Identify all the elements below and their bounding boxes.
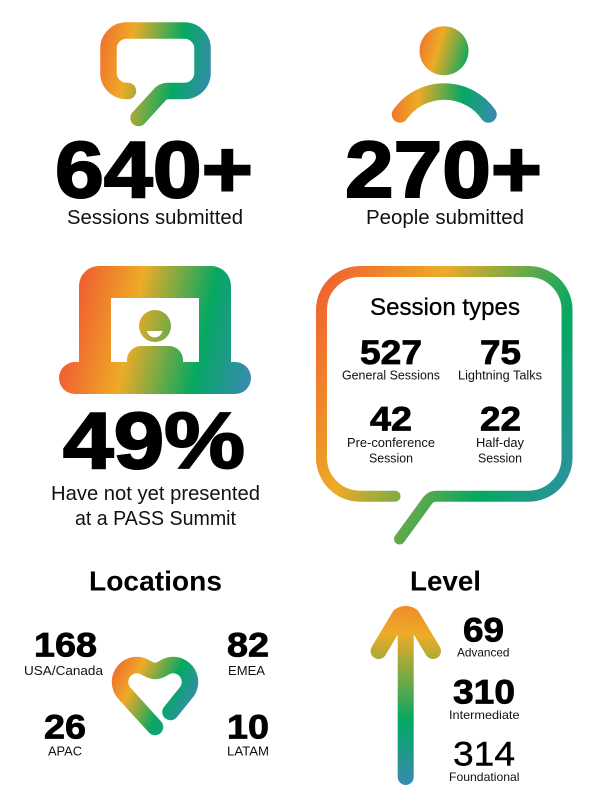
- stat: EMEA: [227, 627, 269, 678]
- stat: advanced: Advanced: [457, 646, 510, 660]
- stat: foundational: 314: [453, 736, 515, 774]
- stat: USA/Canada: USA/Canada: [24, 663, 104, 678]
- stat: USA/Canada: 168: [34, 627, 97, 665]
- stat: APAC: [44, 708, 86, 759]
- stat: half-day session: 22: [480, 401, 521, 439]
- number: 640+: 640+: [55, 125, 253, 214]
- stat: lightning talks: [458, 334, 542, 382]
- heading: locations: Locations: [89, 566, 222, 597]
- number: 49%: 49%: [63, 396, 245, 485]
- stat: advanced: [457, 612, 510, 660]
- panel: session types: [322, 272, 567, 539]
- stat: APAC: APAC: [48, 744, 82, 759]
- stat: general sessions: [342, 334, 440, 382]
- panel: level: [379, 566, 520, 784]
- stat: intermediate: Intermediate: [449, 708, 520, 722]
- stat: lightning talks: 75: [480, 334, 521, 372]
- panel: locations: [24, 566, 269, 759]
- icon: laptop with presenter: [59, 266, 251, 394]
- stat: advanced: 69: [463, 612, 504, 650]
- number: 270+: 270+: [345, 125, 542, 214]
- stat: general sessions: General Sessions: [342, 368, 440, 382]
- label: people submitted: People submitted: [366, 207, 524, 229]
- stat: half-day session: Session: [478, 452, 522, 466]
- stat: pre-conference session: Pre-conference: [347, 436, 435, 450]
- label: have not yet presented: Have not yet presented: [51, 483, 260, 505]
- stat: USA/Canada: [24, 627, 104, 678]
- icon: large speech bubble outline: [322, 272, 567, 539]
- stat: pre-conference session: 42: [370, 401, 412, 439]
- panel: first-time presenters: [51, 266, 260, 530]
- stat: foundational: [449, 736, 520, 784]
- icon: upward arrow: [379, 614, 433, 777]
- stat: half-day session: Half-day: [476, 436, 525, 450]
- icon: speech bubble: [108, 30, 202, 118]
- label: sessions submitted: Sessions submitted: [67, 207, 243, 229]
- panel: people submitted: [345, 26, 542, 229]
- stat: pre-conference session: Session: [369, 452, 413, 466]
- stat: pre-conference session: [347, 401, 435, 466]
- stat: LATAM: [227, 708, 269, 759]
- heading: session types: Session types: [370, 294, 520, 321]
- stat: intermediate: 310: [453, 673, 515, 711]
- stat: lightning talks: Lightning Talks: [458, 368, 542, 382]
- heading: level: Level: [410, 566, 481, 597]
- label: have not yet presented: at a PASS Summit: [75, 508, 236, 530]
- icon: heart: [120, 665, 190, 727]
- stat: half-day session: [476, 401, 525, 466]
- stat: general sessions: 527: [360, 334, 422, 372]
- panel: sessions submitted: [55, 30, 253, 229]
- stat: EMEA: 82: [227, 627, 269, 665]
- stat: LATAM: 10: [227, 708, 269, 746]
- label: have not yet presented: [51, 483, 260, 530]
- stat: LATAM: LATAM: [227, 744, 269, 759]
- stat: APAC: 26: [44, 708, 86, 746]
- stat: intermediate: [449, 673, 520, 722]
- stat: EMEA: EMEA: [228, 663, 265, 678]
- stat: foundational: Foundational: [449, 770, 520, 784]
- icon: person: [400, 26, 488, 115]
